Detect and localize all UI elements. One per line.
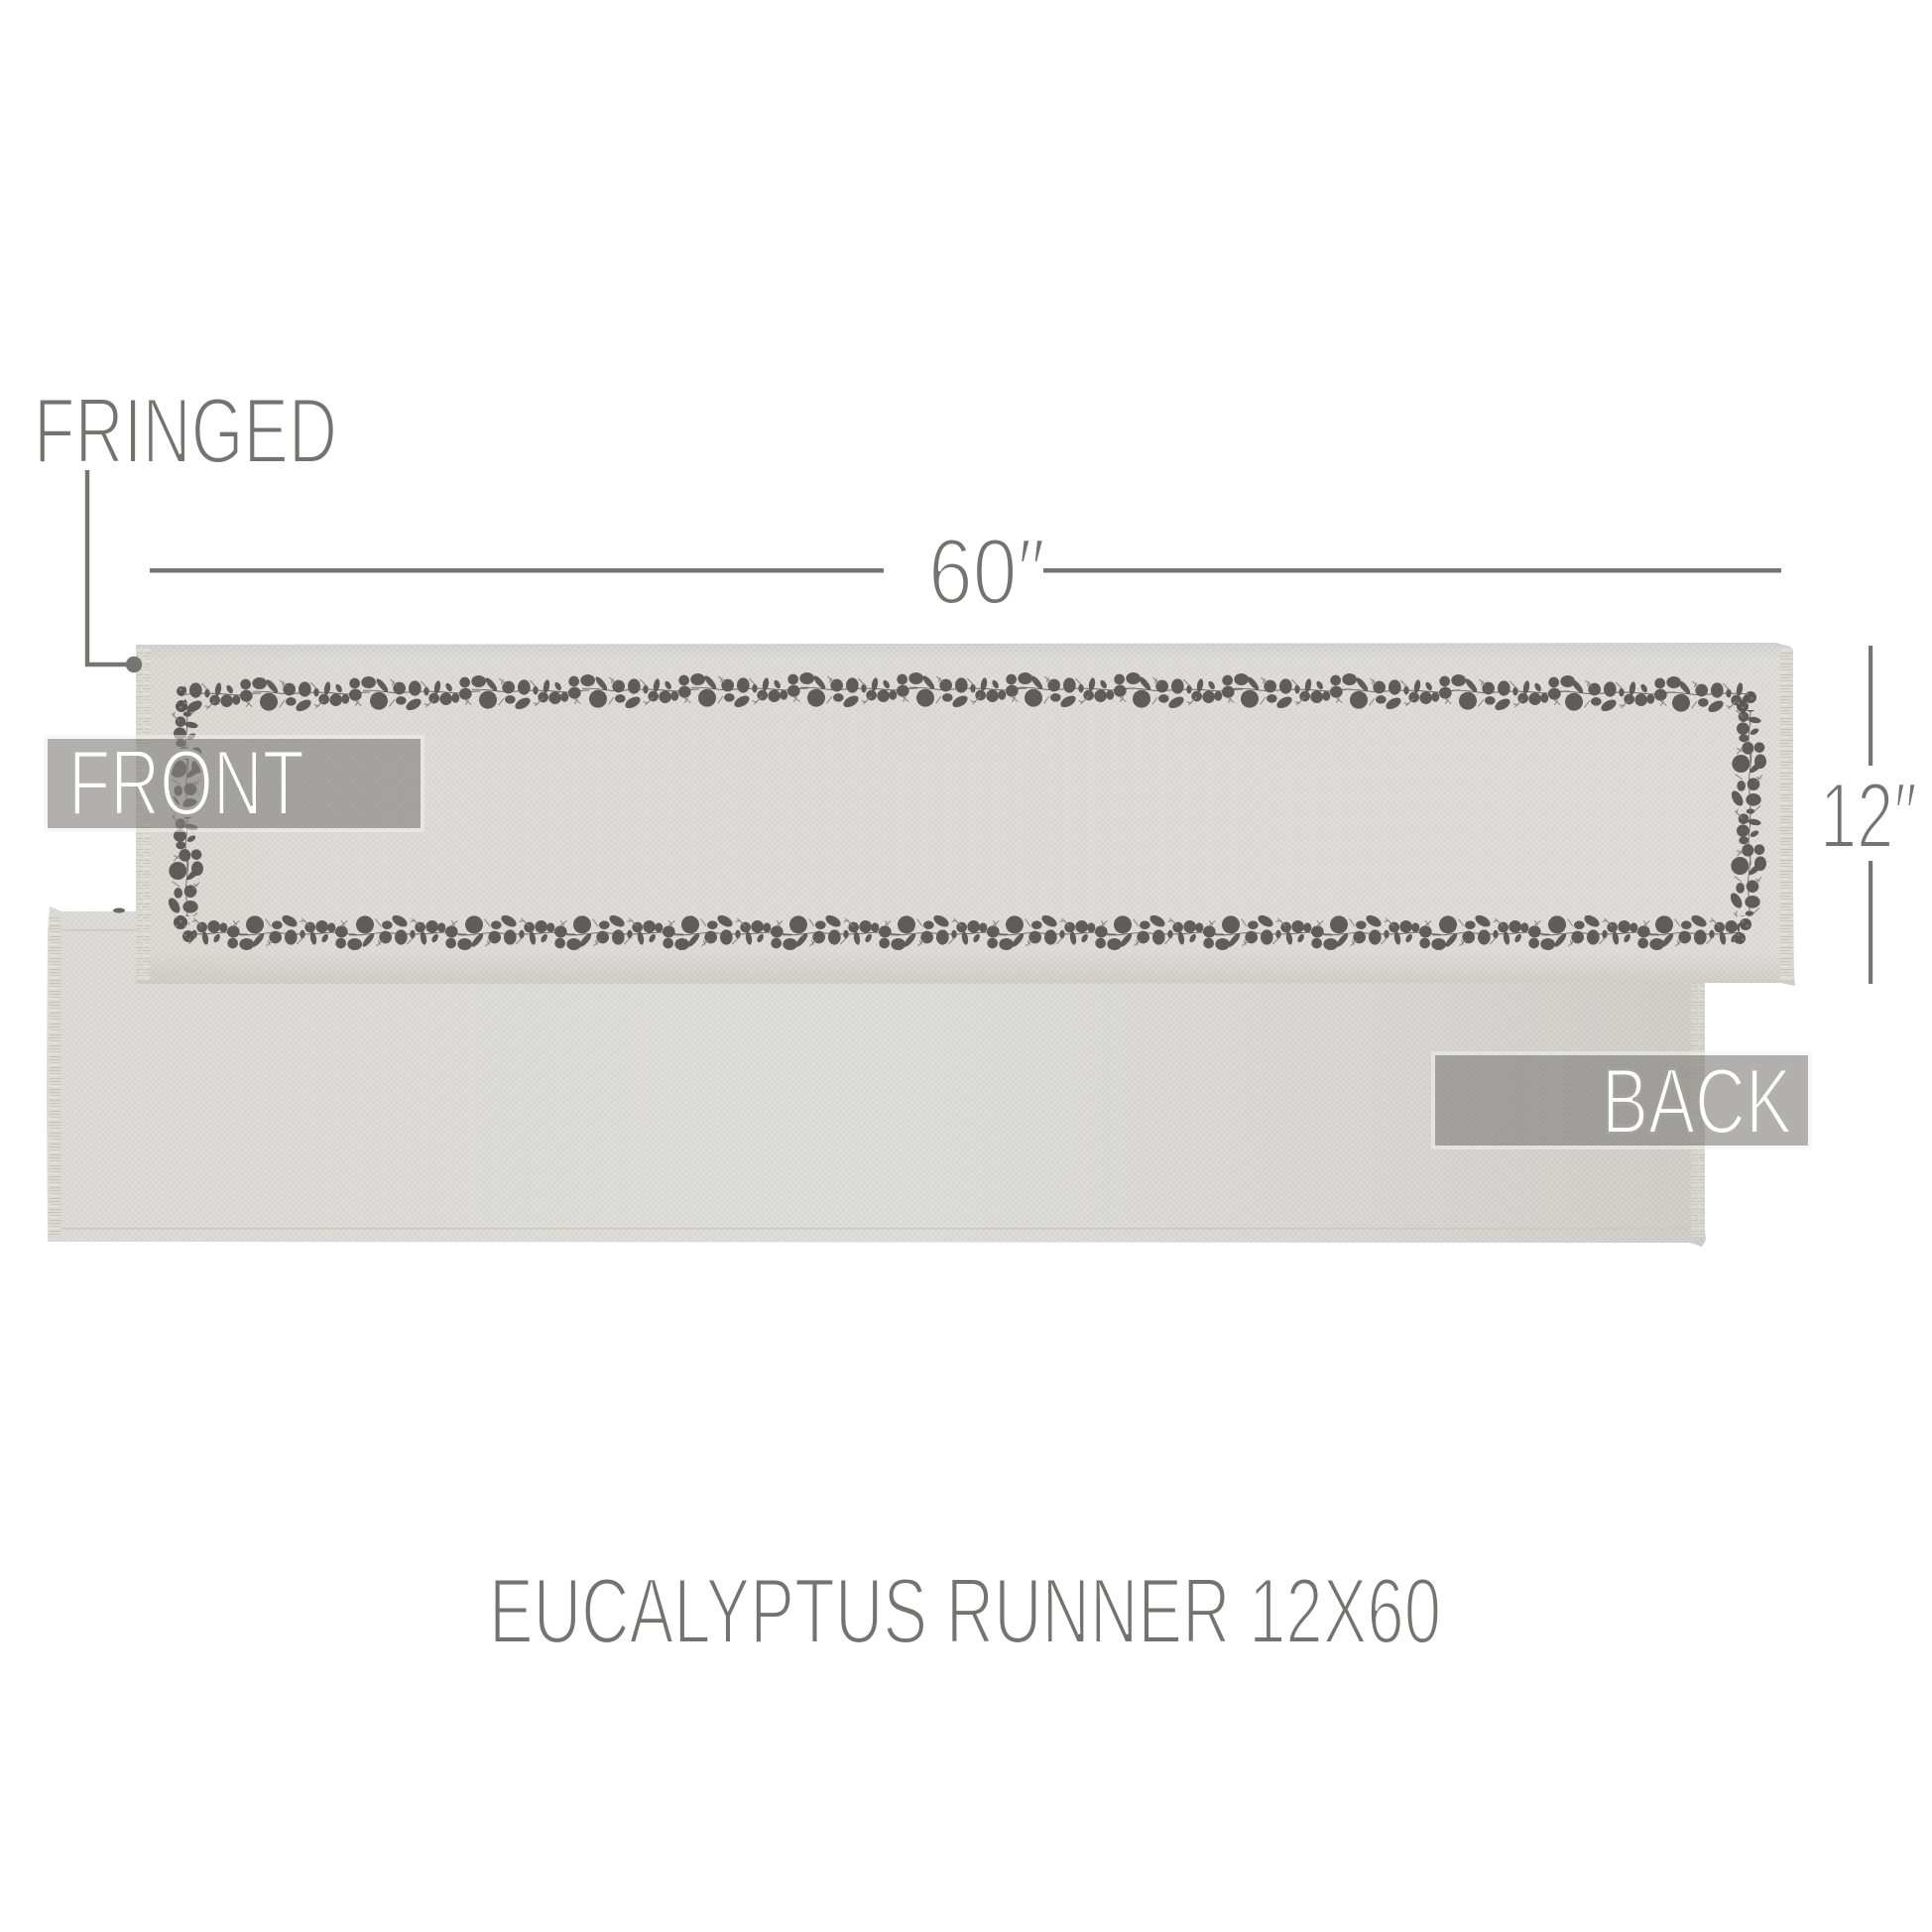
back corner speck: [113, 908, 125, 912]
back bottom hem: [61, 1228, 1691, 1229]
60 inch dimension: [150, 520, 1781, 623]
garland: bottom band: [188, 914, 1740, 950]
front runner: [131, 643, 1795, 986]
FRONT tag: FRONT: [68, 730, 304, 835]
front left fringe: [137, 649, 150, 980]
back right fringe: [1691, 984, 1705, 1237]
back left fringe: [49, 917, 61, 1237]
fringed callout leader: [87, 470, 142, 672]
BACK tag: BACK: [1602, 1049, 1792, 1152]
garland: top band: [144, 672, 1788, 715]
FRINGED label: FRINGED: [34, 379, 337, 482]
garland: left band: [169, 710, 203, 916]
60 inch dimension: 60″: [928, 520, 1045, 623]
garland: right band: [1730, 710, 1766, 916]
12 inch dimension: [1820, 646, 1917, 984]
BACK tag: [1433, 1049, 1810, 1152]
back runner: [47, 906, 1706, 1247]
eucalyptus garland border: [126, 659, 1766, 950]
back top hem: [61, 929, 137, 930]
product title: EUCALYPTUS RUNNER 12X60: [489, 1559, 1441, 1662]
front right fringe: [1780, 649, 1793, 980]
garland: corner sprigs: [174, 686, 1756, 944]
